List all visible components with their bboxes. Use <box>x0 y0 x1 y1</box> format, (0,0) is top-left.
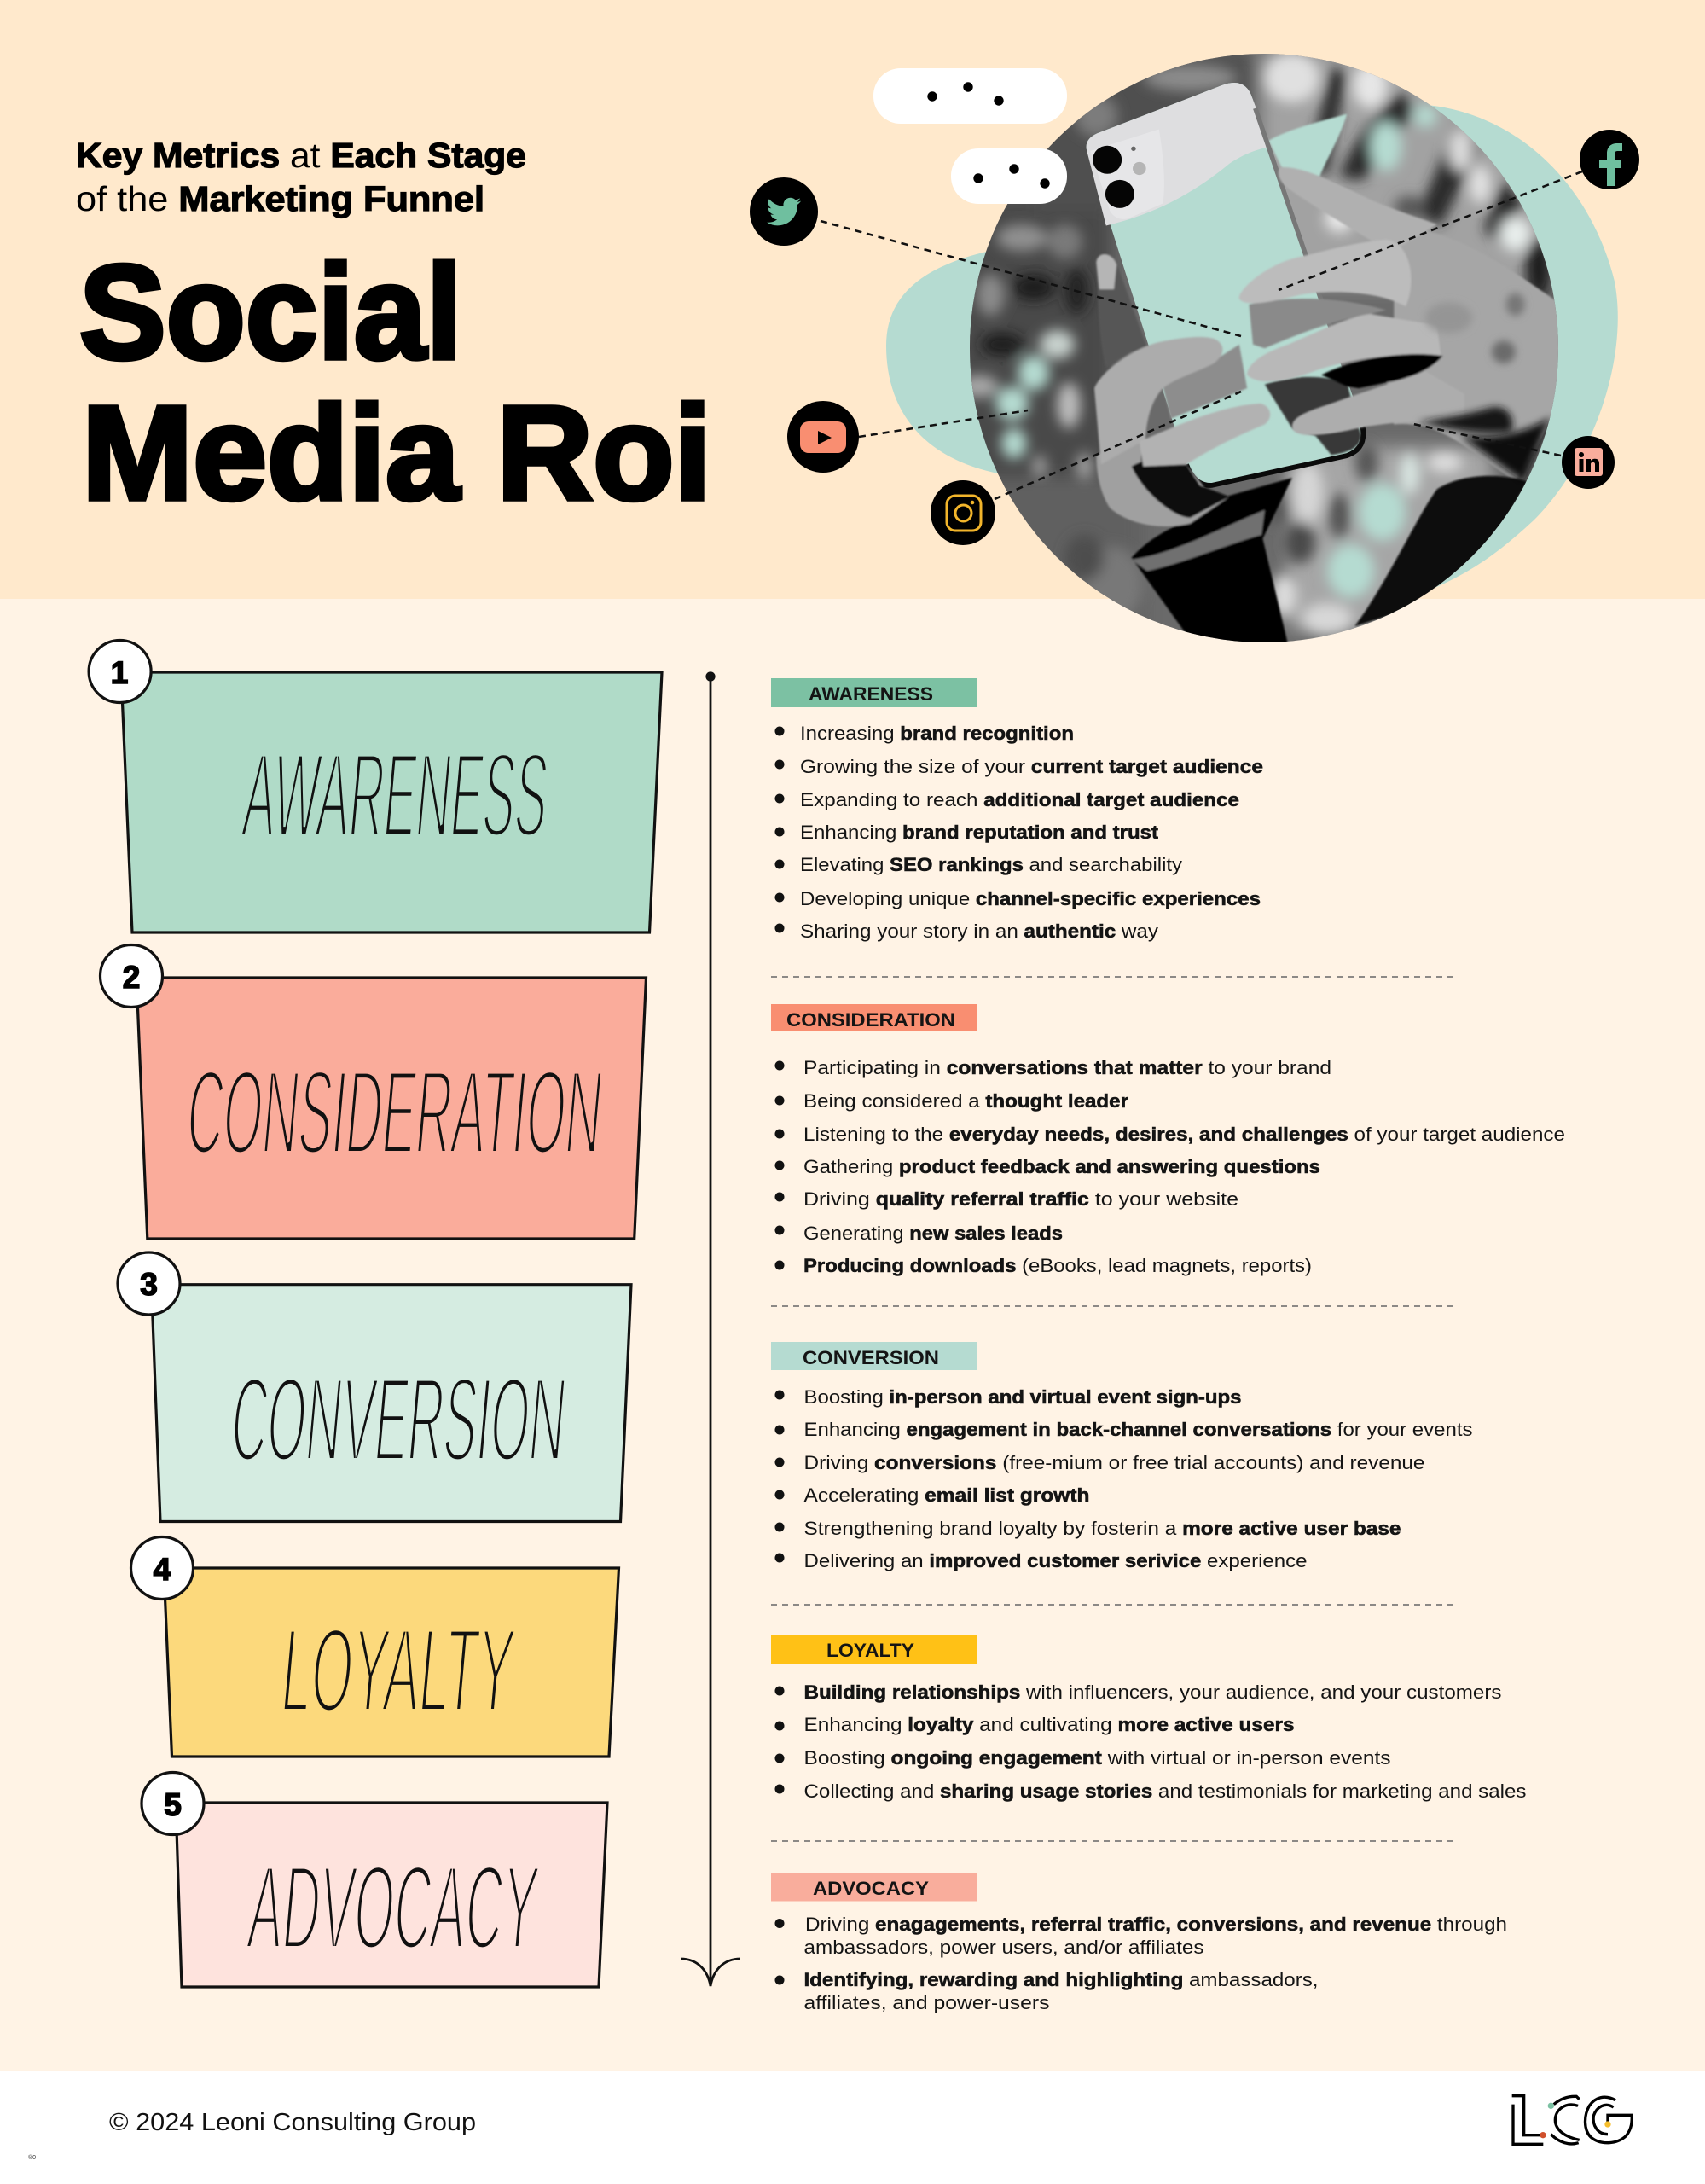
branches top right <box>1265 53 1319 102</box>
lower palm <box>1096 436 1229 526</box>
subtitle <box>76 136 526 218</box>
section: conversion: Boosting in-person and virtual event sign-ups <box>803 1386 1242 1408</box>
section: awareness: Sharing your story in an authentic way <box>800 921 1159 942</box>
section: conversion: CONVERSION <box>803 1347 939 1368</box>
funnel stage 3: conversion: 3 <box>140 1267 158 1302</box>
section: awareness: Enhancing brand reputation and trust <box>800 822 1159 843</box>
footer band <box>0 2071 1705 2184</box>
palm <box>1386 229 1566 481</box>
section: loyalty: Enhancing loyalty and cultivating more active users <box>803 1714 1295 1735</box>
section: consideration: Being considered a thought leader <box>803 1090 1128 1112</box>
section: consideration: Participating in conversations that matter to your brand <box>803 1057 1331 1078</box>
funnel stage 4: loyalty: LOYALTY <box>276 1603 519 1737</box>
section: loyalty: LOYALTY <box>826 1640 914 1661</box>
section: advocacy <box>771 1873 1507 2013</box>
section: advocacy: ambassadors, power users, and/or affiliates <box>803 1937 1204 1958</box>
icon: twitter <box>750 177 818 246</box>
speech bubble 2 <box>951 148 1067 204</box>
section: awareness: Increasing brand recognition <box>800 723 1074 744</box>
pinky <box>1291 372 1418 437</box>
funnel stage 5: advocacy <box>142 1773 607 1987</box>
wrist <box>1132 478 1292 645</box>
mint blobs behind photo <box>886 104 1618 589</box>
section: awareness <box>771 678 1263 942</box>
funnel stage 1: awareness: 1 <box>111 655 128 690</box>
subtitle: Key Metrics at Each Stage <box>76 136 526 175</box>
section: awareness: Developing unique channel-specific experiences <box>800 888 1261 909</box>
speech bubble 1 <box>873 68 1067 124</box>
section: conversion <box>771 1342 1472 1571</box>
section: consideration: Gathering product feedback and answering questions <box>803 1156 1320 1177</box>
section: consideration <box>771 1004 1565 1276</box>
lower finger <box>1140 404 1270 467</box>
funnel stage 2: consideration: 2 <box>123 960 140 995</box>
section: conversion: Driving conversions (free-mium or free trial accounts) and revenue <box>803 1452 1424 1473</box>
funnel stage 4: loyalty <box>131 1537 619 1757</box>
photo background bokeh <box>955 51 1582 660</box>
funnel stage 1: awareness: AWARENESS <box>238 728 554 862</box>
funnel stage 5: advocacy: ADVOCACY <box>243 1840 543 1974</box>
title: Media Roi <box>82 379 711 528</box>
middle finger <box>1239 240 1411 306</box>
footer tiny mark: ®0 <box>28 2154 36 2161</box>
footer copyright: © 2024 Leoni Consulting Group <box>109 2109 476 2136</box>
lower right mottling <box>1292 462 1324 524</box>
section: awareness: AWARENESS <box>809 683 933 705</box>
funnel stage 1: awareness <box>89 640 662 932</box>
index finger <box>1279 167 1437 253</box>
phone back under fingers <box>1249 299 1386 348</box>
text: CONVERSION <box>226 1352 571 1486</box>
section: advocacy: Driving enagagements, referral traffic, conversions, and revenue through <box>805 1914 1507 1935</box>
arrow: funnel timeline <box>681 671 740 1986</box>
left hand <box>1094 254 1292 645</box>
icon: linkedin <box>1562 436 1615 489</box>
section: loyalty: Building relationships with influencers, your audience, and your customers <box>803 1682 1501 1703</box>
phone dark grip <box>1265 377 1360 455</box>
section: loyalty: Collecting and sharing usage stories and testimonials for marketing and sales <box>803 1780 1527 1802</box>
mint patch top right <box>1268 114 1347 181</box>
section: consideration: Generating new sales leads <box>803 1223 1063 1244</box>
ring finger <box>1247 314 1441 381</box>
thumb <box>1096 254 1151 368</box>
icon: youtube <box>787 401 859 473</box>
funnel stage 5: advocacy: 5 <box>164 1787 182 1822</box>
funnel stage 4: loyalty: 4 <box>154 1552 171 1587</box>
section: conversion: Strengthening brand loyalty by fosterin a more active user base <box>803 1518 1401 1539</box>
icon: instagram <box>931 480 995 545</box>
section: loyalty: Boosting ongoing engagement with virtual or in-person events <box>803 1747 1390 1769</box>
connector dashed lines <box>821 171 1582 499</box>
section: conversion: Accelerating email list growth <box>803 1484 1090 1506</box>
text: CONSIDERATION <box>182 1045 608 1179</box>
section: consideration: Driving quality referral traffic to your website <box>803 1188 1238 1210</box>
phone camera <box>1090 130 1164 219</box>
funnel stage 2: consideration <box>101 945 647 1239</box>
title: Social <box>79 238 462 387</box>
section: advocacy: ADVOCACY <box>813 1878 929 1899</box>
gap <box>1321 354 1443 388</box>
hand shadows <box>1418 293 1525 433</box>
section: conversion: Enhancing engagement in back-channel conversations for your events <box>803 1419 1472 1440</box>
photo: hands holding phone <box>955 51 1582 660</box>
right hand <box>1239 167 1566 481</box>
logo: LCG <box>1512 2096 1632 2144</box>
funnel stage 3: conversion <box>118 1252 631 1522</box>
phone <box>1087 83 1365 485</box>
section: loyalty <box>771 1635 1527 1802</box>
subtitle: of the Marketing Funnel <box>76 179 484 218</box>
section: conversion: Delivering an improved customer serivice experience <box>803 1550 1307 1571</box>
section: awareness: Elevating SEO rankings and searchability <box>800 854 1183 875</box>
section: awareness: Expanding to reach additional target audience <box>800 789 1239 810</box>
upper finger <box>1094 337 1222 464</box>
icon: facebook <box>1580 130 1639 189</box>
title <box>79 238 711 528</box>
section: awareness: Growing the size of your current target audience <box>800 756 1263 777</box>
section: consideration: CONSIDERATION <box>786 1009 955 1031</box>
section: advocacy: Identifying, rewarding and highlighting ambassadors, <box>803 1969 1319 1990</box>
header band <box>0 0 1705 599</box>
section: advocacy: affiliates, and power-users <box>803 1992 1049 2013</box>
phone back <box>1163 345 1247 419</box>
section: consideration: Producing downloads (eBooks, lead magnets, reports) <box>803 1255 1312 1276</box>
section: consideration: Listening to the everyday needs, desires, and challenges of your target audience <box>803 1124 1565 1145</box>
sleeve <box>1354 476 1527 626</box>
